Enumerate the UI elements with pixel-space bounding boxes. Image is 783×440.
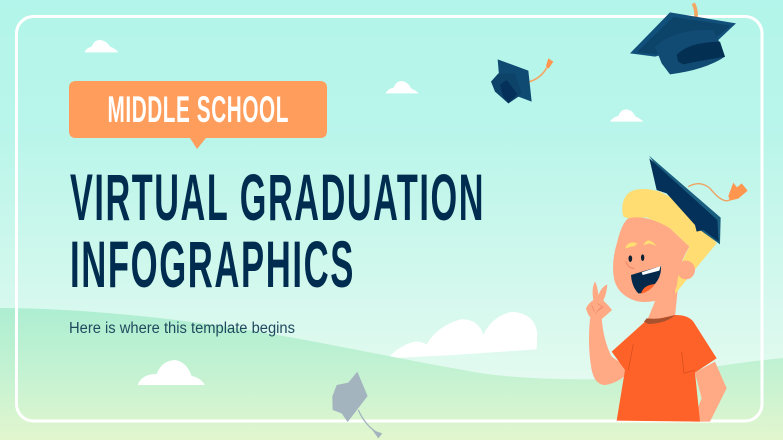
eyes — [628, 255, 632, 262]
mouth — [631, 266, 661, 293]
speech bubble label — [69, 81, 327, 149]
title: INFOGRAPHICS — [70, 228, 355, 301]
big cloud behind hill — [388, 312, 537, 358]
shirt folds — [628, 344, 695, 373]
cap board — [649, 156, 721, 244]
ear — [677, 261, 695, 279]
nose — [626, 261, 634, 268]
hair — [622, 189, 717, 294]
hand with peace sign — [586, 281, 612, 321]
title — [70, 161, 485, 301]
cap tassel — [728, 183, 748, 201]
subtitle: Here is where this template begins — [69, 320, 295, 337]
left arm — [589, 318, 626, 385]
tongue — [641, 284, 655, 294]
bubble shape — [69, 81, 327, 149]
shirt — [612, 315, 717, 422]
icon: faded graduation cap — [332, 372, 382, 438]
cloud: top centre — [385, 81, 419, 93]
neck — [647, 283, 678, 320]
right arm — [693, 362, 727, 422]
background hill — [0, 308, 783, 440]
eyebrows — [625, 240, 657, 248]
cloud: lower left — [138, 360, 205, 385]
shirt collar — [644, 315, 675, 324]
bubble text: MIDDLE SCHOOL — [108, 89, 289, 130]
teeth — [642, 266, 661, 275]
character: boy with graduation cap — [586, 156, 748, 422]
cloud: upper right — [610, 109, 643, 122]
face — [613, 217, 689, 302]
cloud: top left — [84, 40, 118, 52]
icon: small graduation cap — [491, 58, 553, 103]
cap tassel string — [688, 184, 731, 201]
icon: large graduation cap — [630, 3, 736, 74]
